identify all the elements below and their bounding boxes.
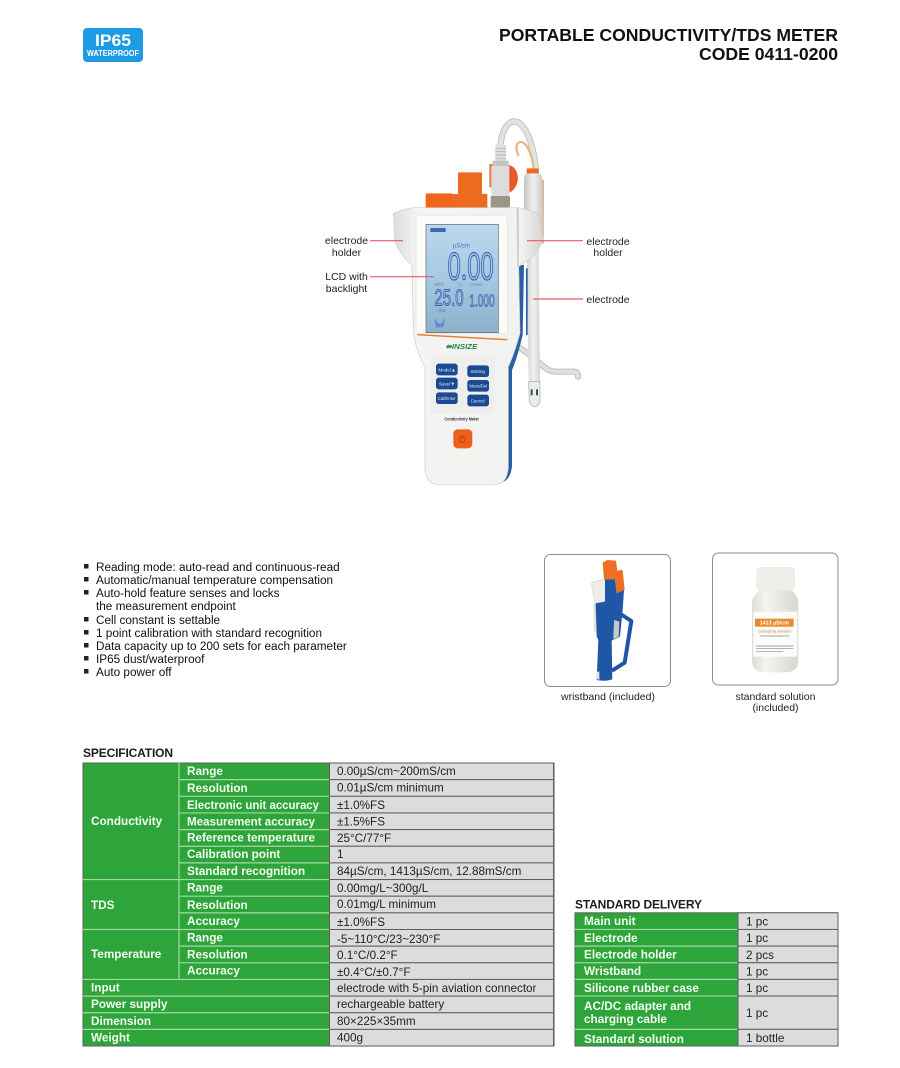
group: general rows: [83, 979, 554, 1046]
keypad: Cal/Enter: [438, 396, 456, 402]
callout: electrode: electrode: [586, 294, 630, 306]
feature list: the measurement endpoint: [96, 600, 237, 613]
table: standard delivery: 2 pcs: [746, 949, 774, 962]
group: TDS: [83, 880, 554, 930]
feature list: IP65 dust/waterproof: [96, 653, 205, 666]
LCD screen: MTC: [434, 282, 445, 287]
group: temperature: [83, 930, 554, 979]
heading: specification: SPECIFICATION: [83, 746, 173, 760]
title: PORTABLE CONDUCTIVITY/TDS METER: [499, 25, 838, 45]
group: temperature: Range: [187, 932, 223, 944]
group: general rows: 80×225×35mm: [337, 1015, 416, 1028]
panel: standard solution: [712, 553, 838, 685]
group: general rows: rechargeable battery: [337, 998, 444, 1011]
table: standard delivery: 1 pc: [746, 1007, 768, 1020]
group: general rows: Input: [91, 982, 120, 994]
group: conductivity: Calibration point: [187, 848, 280, 861]
product image: conductivity meter: [393, 121, 578, 484]
LCD screen: IND: [438, 308, 446, 313]
callout: electrode: [533, 294, 630, 306]
table: standard delivery: Electrode: [584, 932, 638, 945]
feature list: Auto power off: [96, 666, 172, 679]
icon: wristband image: [592, 560, 631, 681]
group: TDS: TDS: [91, 899, 115, 912]
group: TDS: 0.00mg/L~300g/L: [337, 882, 429, 895]
group: temperature: Accuracy: [187, 964, 240, 978]
icon: solution bottle: Conductivity Standard: [758, 629, 791, 633]
group: temperature: ±0.4°C/±0.7°F: [337, 966, 410, 979]
group: conductivity: Conductivity: [91, 815, 163, 828]
callout: electrode holder right: electrode: [586, 236, 630, 248]
group: conductivity: Electronic unit accuracy: [187, 799, 319, 812]
group: temperature: 0.1°C/0.2°F: [337, 949, 398, 962]
LCD screen: 0.00: [448, 245, 494, 288]
feature list: [84, 561, 347, 679]
icon: solution bottle: [752, 567, 798, 672]
callout: electrode holder left: holder: [332, 247, 362, 259]
heading: standard delivery: STANDARD DELIVERY: [575, 898, 702, 912]
LCD screen: °C: [457, 282, 463, 287]
keypad: Save/▼: [439, 381, 455, 387]
group: conductivity: Range: [187, 765, 223, 778]
badge: IP65 waterproof: WATERPROOF: [87, 48, 139, 58]
group: general rows: Power supply: [91, 998, 168, 1011]
group: temperature: -5~110°C/23~230°F: [337, 933, 440, 946]
table: standard delivery: Standard solution: [584, 1033, 684, 1046]
callout: electrode holder right: holder: [593, 247, 623, 259]
badge: IP65 waterproof: IP65: [95, 32, 131, 50]
caption: wristband: wristband (included): [560, 691, 655, 703]
group: TDS: Range: [187, 882, 223, 894]
group: conductivity: ±1.5%FS: [337, 816, 385, 828]
feature list: Data capacity up to 200 sets for each parameter: [96, 640, 347, 653]
power button: [453, 429, 472, 448]
group: general rows: Dimension: [91, 1015, 151, 1028]
electrode cables: [500, 121, 578, 377]
caption: standard solution: (included): [752, 702, 799, 714]
table: standard delivery: [575, 913, 838, 1046]
feature list: Reading mode: auto-read and continuous-read: [96, 561, 340, 574]
table: specification: [83, 763, 554, 1046]
group: conductivity: 25°C/77°F: [337, 832, 391, 845]
keypad: Setting: [470, 369, 485, 375]
caption: standard solution: standard solution: [736, 691, 816, 703]
group: conductivity: 0.00µS/cm~200mS/cm: [337, 765, 456, 778]
keypad: Cancel: [471, 398, 485, 404]
table: standard delivery: Main unit: [584, 915, 636, 928]
LCD screen: µS/cm: [453, 243, 470, 249]
table: standard delivery: 1 bottle: [746, 1032, 784, 1045]
group: conductivity: Standard recognition: [187, 865, 305, 878]
badge: IP65 waterproof: [83, 28, 143, 62]
table: standard delivery: 1 pc: [746, 982, 768, 995]
LCD screen: 25.0: [434, 284, 464, 310]
table: standard delivery: 1 pc: [746, 966, 768, 978]
group: TDS: Accuracy: [187, 915, 240, 928]
group: conductivity: 84µS/cm, 1413µS/cm, 12.88mS/cm: [337, 865, 521, 878]
group: conductivity: 1: [337, 848, 344, 861]
group: conductivity: [91, 763, 554, 880]
orange caps: [426, 172, 487, 208]
group: general rows: Weight: [91, 1032, 130, 1044]
group: conductivity: 0.01µS/cm minimum: [337, 782, 444, 794]
group: TDS: Resolution: [187, 899, 248, 912]
title: CODE 0411-0200: [699, 44, 838, 64]
LCD screen: 1.000: [469, 291, 495, 311]
panel: wristband: [544, 554, 670, 686]
table: standard delivery: Electrode holder: [584, 948, 677, 962]
keypad: [431, 357, 495, 414]
orange stripe: [417, 335, 507, 340]
callout: LCD with backlight: LCD with: [325, 271, 368, 283]
meter body: [393, 208, 543, 484]
group: conductivity: Reference temperature: [187, 832, 315, 844]
callout: electrode holder right: [527, 236, 630, 259]
icon: solution bottle: 1413 µS/cm: [760, 621, 789, 627]
LCD screen: Const: [470, 282, 483, 287]
group: conductivity: Resolution: [187, 782, 248, 795]
callout: LCD with backlight: [325, 271, 434, 295]
group: conductivity: ±1.0%FS: [337, 799, 385, 812]
caption: standard solution: [736, 691, 816, 714]
group: TDS: ±1.0%FS: [337, 916, 385, 929]
table: standard delivery: 1 pc: [746, 916, 768, 928]
electrode: [524, 168, 544, 407]
keypad: Mode/▲: [438, 367, 456, 373]
group: TDS: 0.01mg/L minimum: [337, 898, 436, 911]
group: conductivity: Measurement accuracy: [187, 816, 315, 828]
feature list: Auto-hold feature senses and locks: [96, 587, 280, 600]
keypad: Meas/Del: [469, 384, 487, 390]
feature list: Automatic/manual temperature compensation: [96, 574, 333, 587]
table: standard delivery: charging cable: [584, 1013, 667, 1026]
group: general rows: 400g: [337, 1032, 363, 1044]
feature list: Cell constant is settable: [96, 614, 221, 627]
callout: electrode holder left: electrode: [325, 235, 368, 247]
logo: INSIZE: ⬌INSIZE: [445, 342, 478, 351]
table: standard delivery: Wristband: [584, 965, 641, 978]
callout: electrode holder left: [325, 235, 403, 259]
title: [499, 25, 838, 64]
LCD screen: [426, 224, 498, 333]
group: general rows: electrode with 5-pin aviation connector: [337, 982, 537, 995]
group: temperature: Temperature: [91, 948, 162, 961]
model name: Conductivity Meter: [444, 416, 479, 421]
table: standard delivery: Silicone rubber case: [584, 982, 699, 995]
connector: [489, 145, 518, 207]
feature list: 1 point calibration with standard recognition: [96, 627, 322, 640]
callout: LCD with backlight: backlight: [326, 283, 367, 295]
table: standard delivery: 1 pc: [746, 932, 768, 945]
group: temperature: Resolution: [187, 948, 248, 962]
table: standard delivery: AC/DC adapter and: [584, 1000, 691, 1013]
